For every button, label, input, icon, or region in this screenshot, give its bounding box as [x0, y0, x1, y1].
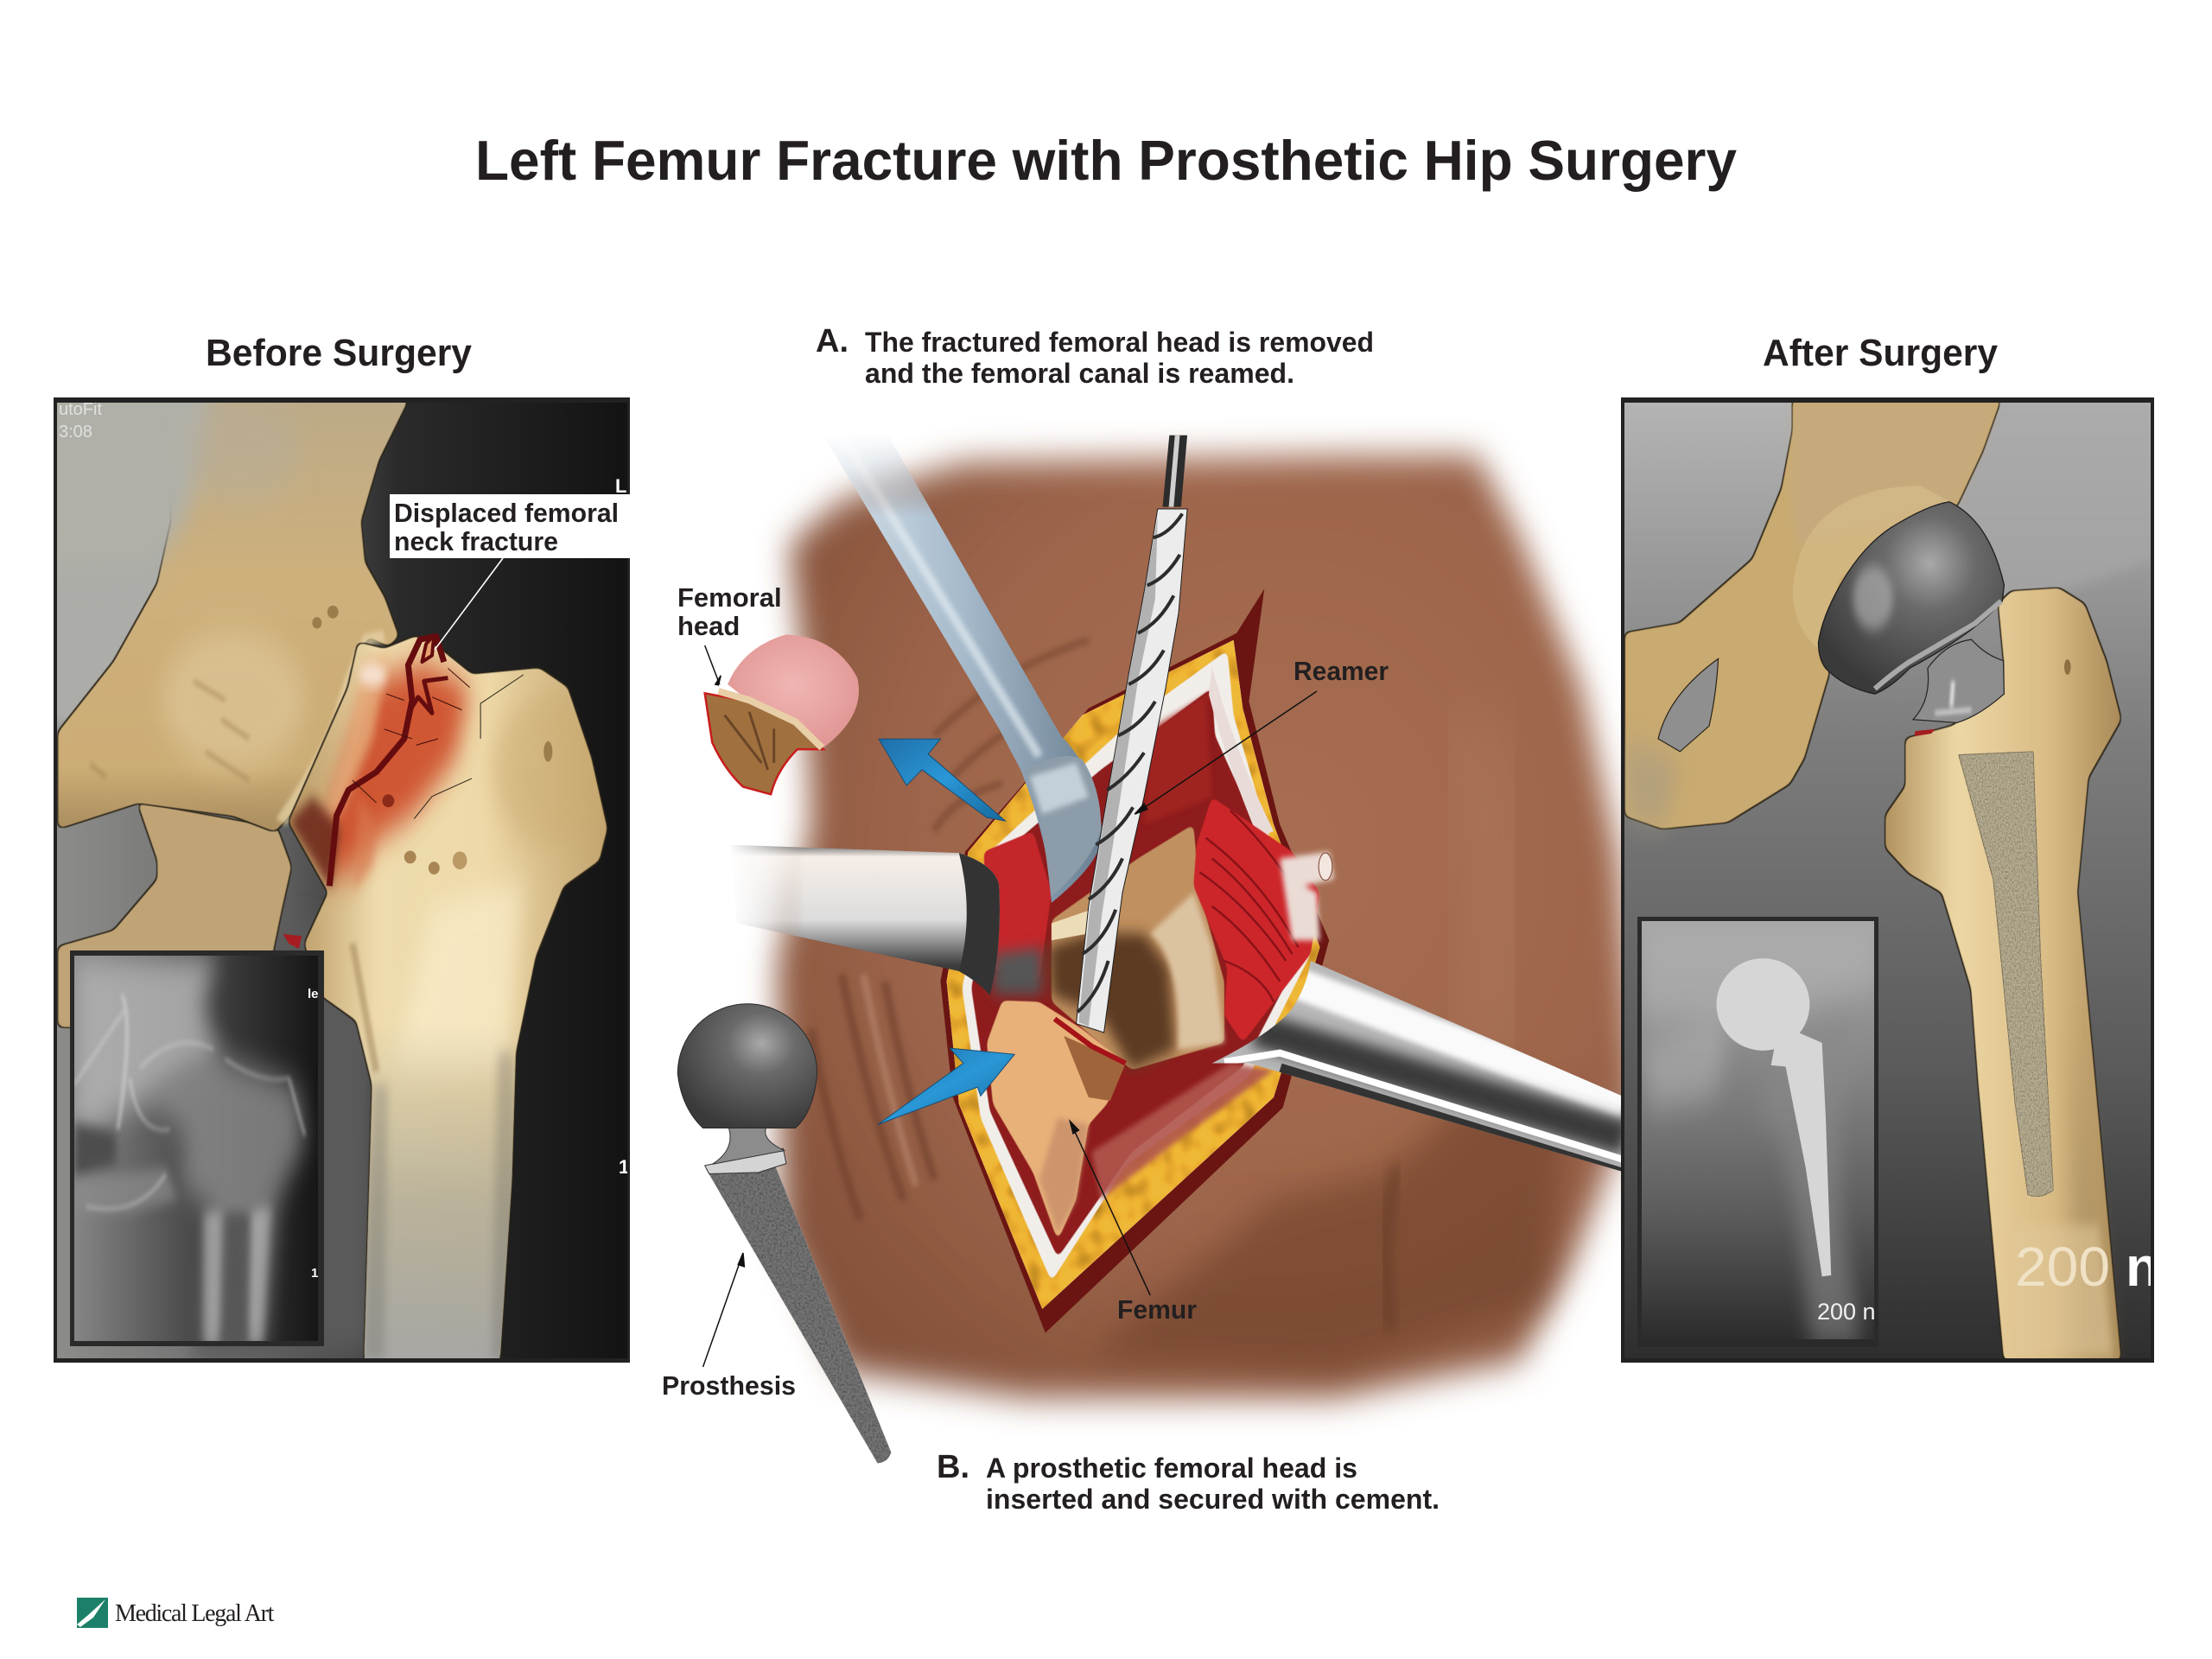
step A [816, 323, 1374, 389]
label: femur: Femur [1117, 1294, 1197, 1325]
fracture bleeding area [289, 656, 470, 893]
panel: before surgery: 3:08 [59, 423, 92, 442]
label: femoral head: head [677, 611, 740, 641]
step A: and the femoral canal is reamed. [865, 358, 1294, 389]
heading: after surgery: After Surgery [1763, 332, 1999, 374]
logo mark [77, 1598, 108, 1628]
heading: before surgery: Before Surgery [206, 332, 473, 374]
femur [289, 636, 611, 1379]
lower pubic ramus [59, 803, 291, 1027]
femoral head specimen [705, 634, 859, 794]
panel: surgical view [677, 435, 1637, 1463]
muscle [1193, 797, 1334, 1043]
inset x-ray: before: 1 [311, 1266, 318, 1281]
panel: after surgery: n [2126, 1236, 2159, 1298]
panel: before surgery: L [615, 475, 626, 497]
arrow: insertion [878, 1048, 1014, 1125]
panel: before surgery [54, 397, 630, 1363]
exposed bone [1048, 824, 1224, 1070]
inset x-ray: before [70, 950, 324, 1347]
pelvis [57, 403, 407, 832]
scale text: 200 [2015, 1236, 2110, 1298]
small blood mark [283, 934, 302, 949]
callout: displaced femoral neck fracture [390, 494, 630, 650]
leader lines [703, 645, 1317, 1367]
arrow: removal [879, 739, 1005, 821]
title: Left Femur Fracture with Prosthetic Hip Surgery [475, 129, 1737, 192]
label: femoral head: Femoral [677, 582, 782, 613]
retractor: left [731, 845, 1000, 995]
fracture line [329, 635, 524, 886]
step B: A prosthetic femoral head is [986, 1452, 1357, 1484]
implant ghost [1716, 958, 1831, 1276]
step B: B. [937, 1449, 969, 1485]
inset x-ray: before: le [308, 987, 319, 1001]
obturator foramen [1658, 658, 1719, 752]
step A: A. [816, 323, 849, 359]
skin [777, 455, 1637, 1398]
prosthesis neck [1913, 639, 2004, 722]
step B [937, 1449, 1440, 1515]
panel: before surgery: 1 [619, 1156, 629, 1178]
inset x-ray: after [1637, 917, 1878, 1347]
callout: displaced femoral neck fracture: Displaced femoral [394, 498, 619, 528]
label: prosthesis: Prosthesis [662, 1370, 796, 1401]
step A: The fractured femoral head is removed [865, 327, 1374, 358]
x-ray labels: utoFit [59, 400, 102, 419]
reamer [1077, 435, 1187, 1033]
prosthesis [677, 1004, 891, 1463]
callout: displaced femoral neck fracture: neck fracture [394, 526, 558, 556]
femur [987, 1001, 1126, 1241]
retractor: right [1212, 961, 1625, 1176]
logo: medical legal art: Medical Legal Art [115, 1600, 275, 1627]
incision [940, 588, 1329, 1333]
cement mantle [1959, 752, 2053, 1197]
retractor: top blade [823, 435, 1103, 903]
prosthetic head [1818, 502, 2004, 713]
pelvis [1625, 399, 2000, 829]
inset x-ray: after: 200 n [1817, 1299, 1876, 1325]
panel: after surgery [1621, 397, 2159, 1363]
step B: inserted and secured with cement. [986, 1484, 1440, 1515]
femur with implant [1885, 588, 2120, 1360]
label: reamer: Reamer [1294, 656, 1389, 686]
